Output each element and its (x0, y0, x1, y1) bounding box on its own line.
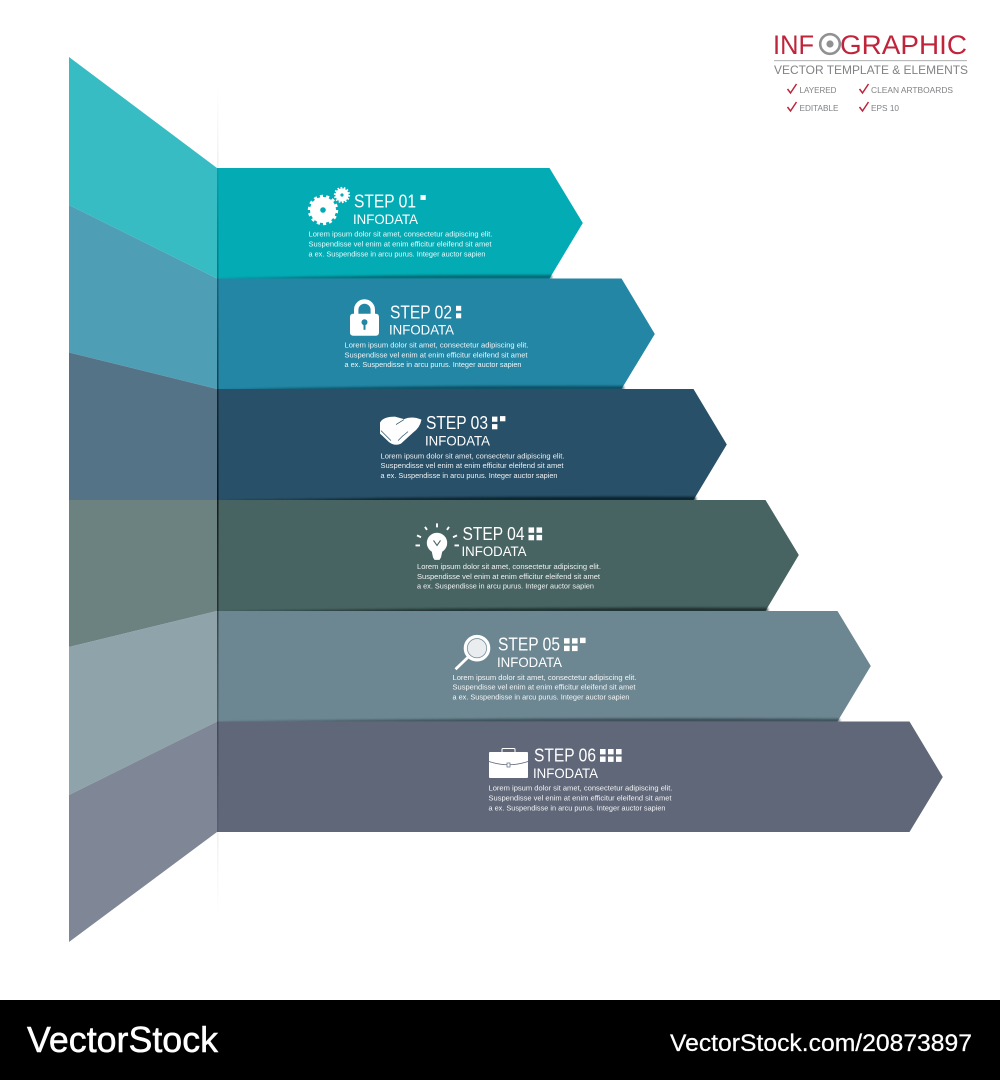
step 5 body text (452, 675, 637, 702)
arrow bar 1 (217, 168, 583, 278)
step 1 label: INFODATA (353, 211, 419, 227)
step 6 body text: Lorem ipsum dolor sit amet, consectetur adipiscing elit. (488, 786, 673, 793)
step 4 content (416, 523, 601, 591)
bar 2 shadow (217, 386, 624, 390)
icon: logo target circle (820, 34, 840, 54)
step 3 body text: a ex. Suspendisse in arcu purus. Integer auctor sapien (380, 473, 558, 480)
step 3 label: INFODATA (425, 432, 491, 448)
feature checklist: EDITABLE (800, 103, 839, 113)
logo subtitle: VECTOR TEMPLATE & ELEMENTS (774, 63, 968, 77)
step 4 body text: Lorem ipsum dolor sit amet, consectetur adipiscing elit. (417, 564, 601, 571)
icon: gears (309, 188, 349, 224)
icon: magnifier (456, 636, 489, 669)
step 2 heading: STEP 02 (390, 302, 452, 322)
step 2 content (344, 302, 529, 369)
left perspective panels (69, 57, 217, 942)
step 1 body text: Suspendisse vel enim at enim efficitur eleifend sit amet (308, 242, 492, 248)
step 6 body text: Suspendisse vel enim at enim efficitur eleifend sit amet (488, 796, 672, 802)
step 5 body text: a ex. Suspendisse in arcu purus. Integer auctor sapien (452, 694, 630, 702)
feature checklist (788, 84, 953, 113)
step 6 content (488, 746, 673, 812)
icon: light bulb (416, 523, 459, 560)
step 4 body text: a ex. Suspendisse in arcu purus. Integer auctor sapien (417, 584, 594, 591)
feature checklist: CLEAN ARTBOARDS (871, 85, 953, 95)
step 4 label: INFODATA (462, 543, 527, 559)
step 1 content (308, 188, 493, 258)
arrow bar 3 (217, 389, 727, 500)
step 2 body text: Suspendisse vel enim at enim efficitur eleifend sit amet (344, 352, 528, 359)
step 5 body text: Suspendisse vel enim at enim efficitur eleifend sit amet (452, 685, 636, 692)
step 5 label: INFODATA (497, 654, 563, 670)
step 1 heading: STEP 01 (354, 192, 416, 212)
step 4 body text (417, 564, 601, 591)
step 4 heading: STEP 04 (462, 524, 524, 544)
step 1 body text (308, 232, 493, 258)
icon: padlock (350, 302, 379, 336)
logo: infographic title: INF (773, 30, 814, 60)
step 6 count markers (600, 749, 622, 762)
step 3 count markers (492, 416, 505, 429)
step 6 body text (488, 786, 673, 812)
step 2 count markers (456, 306, 461, 318)
logo: infographic title (773, 30, 967, 61)
step 3 body text (380, 453, 565, 480)
icon: briefcase (489, 748, 528, 778)
arrow bar 2 (217, 278, 655, 389)
step 3 body text: Lorem ipsum dolor sit amet, consectetur adipiscing elit. (380, 453, 565, 460)
center fold line (217, 85, 218, 915)
feature checklist: LAYERED (800, 85, 836, 95)
bar 4 shadow (217, 608, 768, 612)
step 6 heading: STEP 06 (534, 746, 596, 766)
logo: infographic title: GRAPHIC (840, 30, 967, 60)
step 1 body text: a ex. Suspendisse in arcu purus. Integer auctor sapien (308, 251, 486, 258)
step 2 label: INFODATA (389, 322, 455, 338)
feature checklist: EPS 10 (871, 103, 899, 113)
step 4 count markers (528, 527, 542, 540)
footer image id: VectorStock.com/20873897 (670, 1030, 972, 1057)
bar 3 shadow (217, 497, 696, 501)
step 2 body text: Lorem ipsum dolor sit amet, consectetur adipiscing elit. (344, 342, 529, 350)
step 6 body text: a ex. Suspendisse in arcu purus. Integer auctor sapien (488, 805, 666, 812)
step 5 content (452, 635, 637, 702)
step 2 body text: a ex. Suspendisse in arcu purus. Integer auctor sapien (344, 362, 522, 369)
step 3 body text: Suspendisse vel enim at enim efficitur eleifend sit amet (380, 463, 564, 470)
step 5 body text: Lorem ipsum dolor sit amet, consectetur adipiscing elit. (452, 675, 637, 682)
footer bar (0, 1000, 1000, 1080)
step 5 count markers (564, 638, 586, 651)
footer brand: VectorStock (27, 1019, 219, 1060)
bar 5 shadow (217, 718, 840, 722)
step 1 count marker (420, 195, 426, 200)
step 5 heading: STEP 05 (498, 635, 560, 655)
step 3 heading: STEP 03 (426, 413, 488, 433)
icon: handshake (380, 417, 422, 445)
step 4 body text: Suspendisse vel enim at enim efficitur eleifend sit amet (417, 574, 600, 581)
step 3 content (380, 413, 565, 480)
bar 1 shadow (217, 275, 552, 279)
step 2 body text (344, 342, 529, 369)
step 1 body text: Lorem ipsum dolor sit amet, consectetur adipiscing elit. (308, 232, 493, 239)
arrow bar 5 (217, 611, 871, 722)
arrow bar 4 (217, 500, 799, 611)
arrow bar 6 (217, 722, 943, 832)
step 6 label: INFODATA (533, 765, 599, 781)
